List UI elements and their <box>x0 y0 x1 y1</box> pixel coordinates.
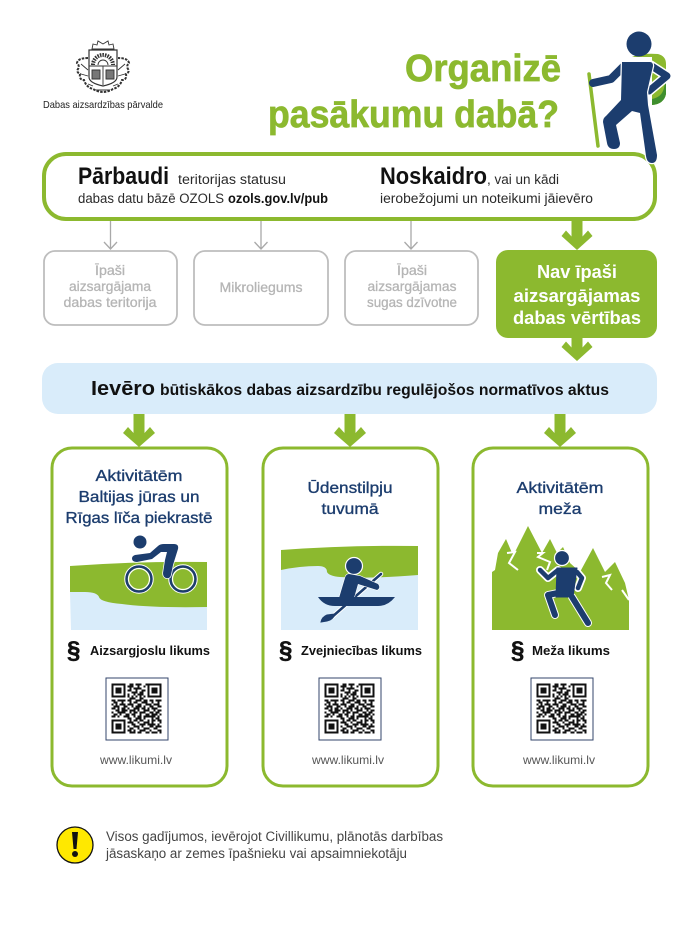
panel: specially protected nature territory: aizsargājama <box>69 278 151 294</box>
QR code 1 <box>106 678 168 740</box>
text: check status: Pārbaudi <box>78 163 169 190</box>
law: forest law <box>511 637 610 664</box>
panel: observe regulations band: būtiskākos dabas aizsardzību regulējošos normatīvos aktus <box>160 382 609 399</box>
panel: no specially protected values: Nav īpaši <box>537 262 617 282</box>
panel: specially protected nature territory <box>44 251 177 325</box>
text: warning note <box>105 829 443 861</box>
illustration: runner in forest <box>492 526 629 630</box>
text: warning note: jāsaskaņo ar zemes īpašnieku vai apsaimniekotāju <box>105 846 407 861</box>
panel: micro-reserve <box>194 251 328 325</box>
panel: protected species habitat: aizsargājamas <box>368 278 456 294</box>
panel: protected species habitat: Īpaši <box>397 262 427 278</box>
panel: no specially protected values: dabas vērtības <box>513 308 641 328</box>
title: Organizē <box>405 48 561 90</box>
heading: forest: Aktivitātēm <box>516 480 604 497</box>
law: fisheries law <box>279 637 422 664</box>
heading: forest <box>516 480 604 518</box>
illustration: kayaker <box>281 546 418 630</box>
arrow: to card 1 <box>123 414 155 447</box>
heading: coast: Rīgas līča piekrastē <box>66 510 213 527</box>
text: find out restrictions: ierobežojumi un noteikumi jāievēro <box>380 191 593 206</box>
text: check status: teritorijas statusu <box>178 172 286 187</box>
panel: no specially protected values <box>496 250 657 338</box>
link 2: www.likumi.lv <box>311 753 384 767</box>
law: coastal zone law: § <box>67 637 80 664</box>
link 1: www.likumi.lv <box>99 753 172 767</box>
panel: observe regulations band <box>42 363 657 414</box>
arrow: to card 2 <box>334 414 366 447</box>
panel: no specially protected values: aizsargājamas <box>514 286 640 306</box>
QR code 3 <box>531 678 593 740</box>
title <box>268 48 561 136</box>
law: fisheries law: Zvejniecības likums <box>301 643 422 658</box>
text: find out restrictions: Noskaidro <box>380 163 487 190</box>
text: warning note: Visos gadījumos, ievērojot Civillikumu, plānotās darbības <box>106 829 443 844</box>
text: find out restrictions: , vai un kādi <box>487 172 559 187</box>
panel: micro-reserve: Mikroliegums <box>220 279 302 295</box>
icon: hiker <box>589 32 667 163</box>
text: organisation name: Dabas aizsardzības pārvalde <box>43 100 163 111</box>
QR code 2 <box>319 678 381 740</box>
panel: observe regulations band: Ievēro <box>91 377 155 400</box>
text: check status <box>78 163 328 206</box>
panel: forest activities <box>473 448 648 786</box>
panel: specially protected nature territory: Īpaši <box>95 262 125 278</box>
heading: forest: meža <box>538 501 582 518</box>
heading: water: tuvumā <box>322 501 379 518</box>
text: check status: dabas datu bāzē OZOLS <box>78 191 224 206</box>
arrow: green to valued box <box>562 221 592 250</box>
link 3: www.likumi.lv <box>522 753 595 767</box>
arrow: to card 3 <box>544 414 576 447</box>
arrow: grey 2 <box>254 221 268 249</box>
heading: coast <box>66 468 213 527</box>
law: coastal zone law <box>67 637 210 664</box>
icon: warning <box>57 827 93 863</box>
panel: specially protected nature territory: dabas teritorija <box>64 294 157 310</box>
logo: coat of arms and organisation name <box>43 41 163 111</box>
law: forest law: Meža likums <box>532 643 610 658</box>
text: check status: ozols.gov.lv/pub <box>228 191 328 206</box>
arrow: grey 3 <box>404 221 418 249</box>
illustration: cyclist on coast <box>70 536 207 630</box>
panel: coast activities <box>52 448 227 786</box>
panel: protected species habitat <box>345 251 478 325</box>
heading: water: Ūdenstilpju <box>308 479 392 497</box>
law: fisheries law: § <box>279 637 292 664</box>
icon: coat of arms <box>77 41 129 92</box>
title: pasākumu dabā? <box>268 94 559 136</box>
heading: coast: Aktivitātēm <box>96 468 182 485</box>
arrow: green to regulations band <box>562 338 592 361</box>
heading: coast: Baltijas jūras un <box>78 489 200 506</box>
panel: check status and restrictions <box>44 154 655 219</box>
text: find out restrictions <box>380 163 593 206</box>
law: forest law: § <box>511 637 524 664</box>
arrow: grey 1 <box>104 221 117 249</box>
law: coastal zone law: Aizsargjoslu likums <box>90 643 210 658</box>
panel: protected species habitat: sugas dzīvotne <box>367 294 457 310</box>
heading: water <box>308 479 392 518</box>
panel: near water bodies <box>263 448 438 786</box>
